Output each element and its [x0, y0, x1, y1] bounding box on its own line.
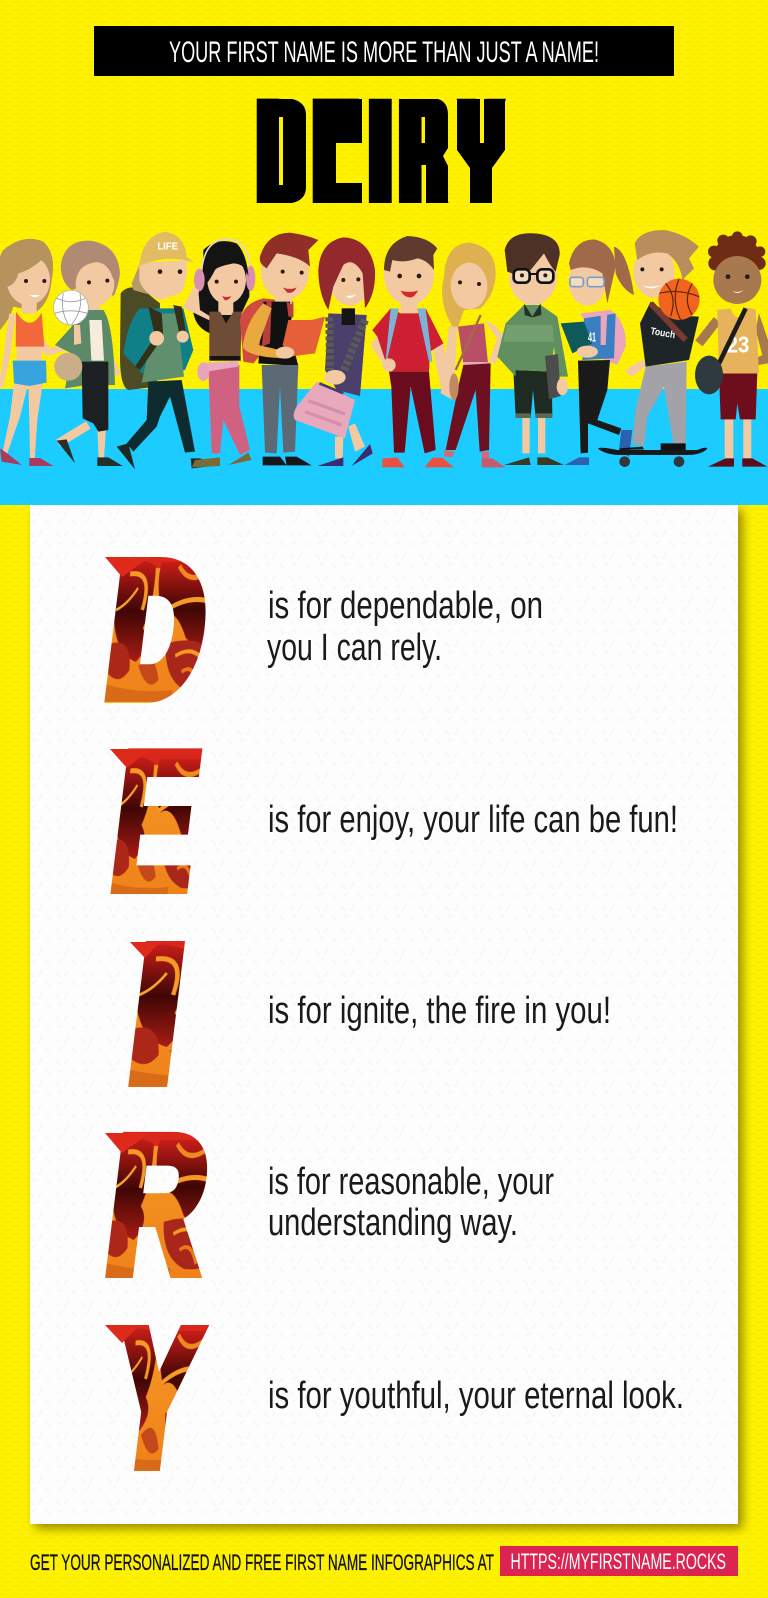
letter E: flame: E — [99, 709, 213, 935]
person: girl with ponytail and tablet — [561, 239, 634, 465]
right six students — [371, 230, 768, 467]
left six students — [0, 232, 375, 469]
person: girl with ponytail and tablet: 41 — [588, 331, 596, 345]
person: blonde girl with maroon trousers — [441, 243, 507, 467]
person: girl with pink headphones — [183, 239, 255, 467]
banner: tagline — [94, 26, 674, 76]
text: D line: you I can rely. — [267, 627, 442, 669]
illustration: group of twelve students — [0, 230, 768, 469]
person: girl with pink bag — [294, 237, 375, 466]
person: boy reading a book — [240, 233, 325, 465]
text: R line: understanding way. — [268, 1202, 518, 1244]
title: name: R — [401, 86, 439, 215]
person: boy in yellow tank top: 23 — [727, 332, 749, 358]
text: R line: is for reasonable, your — [268, 1161, 554, 1203]
person: girl in orange top — [0, 239, 80, 466]
panel: white letters card — [30, 505, 738, 1524]
text: I line: is for ignite, the fire in you! — [268, 990, 611, 1032]
letter R: flame: R — [96, 1096, 220, 1314]
person: skateboarder holding basketball: Touch — [649, 326, 676, 341]
blue floor band — [0, 389, 768, 505]
text: D line — [267, 585, 543, 669]
title: name — [257, 86, 505, 216]
title: name: I — [372, 86, 389, 215]
person: boy in yellow tank top — [658, 231, 768, 467]
footer: call to action: GET YOUR PERSONALIZED AND FREE FIRST NAME INFOGRAPHICS AT — [30, 1550, 494, 1575]
text: R line — [268, 1161, 554, 1244]
letter D: flame: D — [98, 527, 216, 735]
title: name: D — [259, 88, 301, 216]
person: boy in red shirt — [371, 236, 454, 467]
letter Y: flame: Y — [105, 1293, 207, 1504]
person: girl with volleyball — [54, 241, 123, 466]
person: hiker with cap and backpack: LIFE — [157, 241, 178, 252]
letter I: flame: I — [120, 909, 193, 1120]
title: name: Y — [465, 86, 497, 215]
person: skateboarder holding basketball — [598, 230, 707, 467]
title: name: E — [315, 87, 356, 215]
person: hiker with cap and backpack — [117, 232, 220, 469]
text: D line: is for dependable, on — [268, 585, 543, 627]
person: boy with glasses and green sweater — [497, 233, 568, 465]
